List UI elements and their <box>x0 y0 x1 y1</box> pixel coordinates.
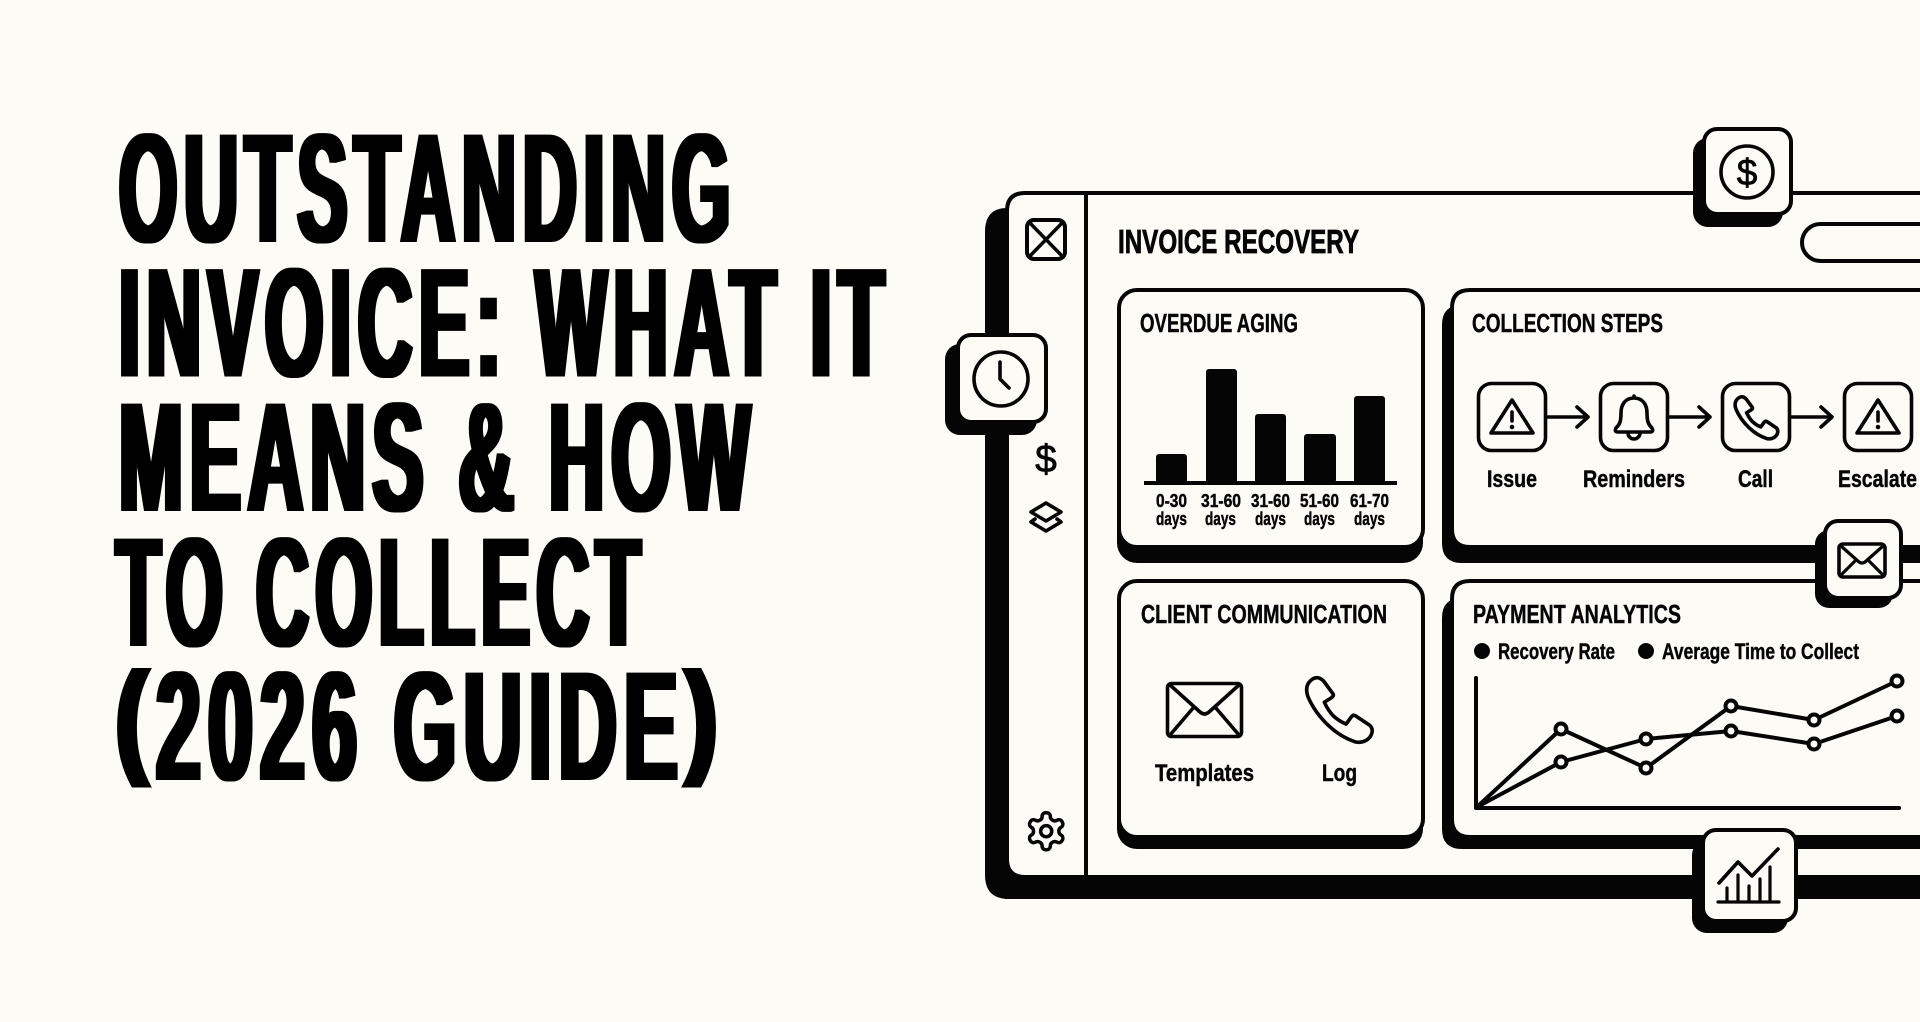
bar chart: aging buckets: 0-30 <box>1156 491 1187 511</box>
title: ) <box>684 646 718 789</box>
heading: invoice recovery: INVOICE RECOVERY <box>1118 223 1359 260</box>
heading: payment analytics: PAYMENT ANALYTICS <box>1473 599 1681 629</box>
card: dollar badge <box>1693 129 1791 227</box>
icon: settings gear <box>1030 813 1063 850</box>
title: TO COLLECT <box>116 506 647 680</box>
title <box>115 102 891 814</box>
step: call: Call <box>1738 466 1773 493</box>
step: escalate <box>1838 384 1917 493</box>
panel: payment analytics <box>1442 581 1920 849</box>
bar chart: aging buckets: 31-60 <box>1251 491 1290 511</box>
label: log: Log <box>1322 760 1357 787</box>
card: analytics badge <box>1692 830 1796 933</box>
icon: phone log <box>1307 678 1372 742</box>
icon: envelope templates <box>1168 684 1242 736</box>
bar chart: aging buckets: 61-70 <box>1350 491 1389 511</box>
label: templates: Templates <box>1155 760 1254 787</box>
card: clock badge <box>945 335 1046 435</box>
title: ( <box>115 646 149 789</box>
panel: dashboard window <box>985 193 1920 899</box>
bar chart: aging buckets: days <box>1255 509 1286 529</box>
heading: client communication: CLIENT COMMUNICATION <box>1141 599 1387 629</box>
bar chart: aging buckets: days <box>1354 509 1385 529</box>
legend <box>1474 639 1860 664</box>
bar chart: aging buckets: days <box>1304 509 1335 529</box>
legend: Recovery Rate <box>1498 639 1615 664</box>
panel: client communication <box>1117 581 1423 849</box>
panel: overdue aging <box>1117 290 1423 563</box>
step: issue: Issue <box>1487 466 1537 493</box>
card: dollar badge: $ <box>1737 152 1757 193</box>
line chart: recovery rate and time to collect <box>1476 676 1902 808</box>
bar chart: aging buckets: days <box>1156 509 1187 529</box>
card: envelope badge <box>1815 521 1901 608</box>
bar chart: aging buckets: days <box>1205 509 1236 529</box>
heading: overdue aging: OVERDUE AGING <box>1140 308 1298 338</box>
title: OUTSTANDING <box>119 102 737 276</box>
icon: sidebar dollar: $ <box>1035 438 1057 481</box>
step: reminders: Reminders <box>1583 466 1685 493</box>
title: 2026 GUIDE <box>156 640 685 814</box>
text: INVOICE: WHAT IT <box>119 236 891 410</box>
arrow: call to escalate <box>1791 407 1832 427</box>
heading: collection steps: COLLECTION STEPS <box>1472 308 1663 338</box>
bar chart: aging buckets: 31-60 <box>1201 491 1241 511</box>
title: MEANS & HOW <box>119 371 757 545</box>
panel: collection steps <box>1442 290 1920 563</box>
arrow: issue to reminders <box>1547 407 1588 427</box>
arrow: reminders to call <box>1669 407 1710 427</box>
step: issue <box>1478 384 1546 493</box>
bar chart: aging buckets <box>1144 369 1397 529</box>
step: call <box>1722 384 1790 493</box>
search pill <box>1802 224 1920 261</box>
legend: Average Time to Collect <box>1662 639 1860 664</box>
icon: app logo box <box>1027 220 1065 259</box>
bar chart: aging buckets: 51-60 <box>1300 491 1339 511</box>
step: reminders <box>1583 384 1685 493</box>
icon: layers <box>1031 503 1061 531</box>
